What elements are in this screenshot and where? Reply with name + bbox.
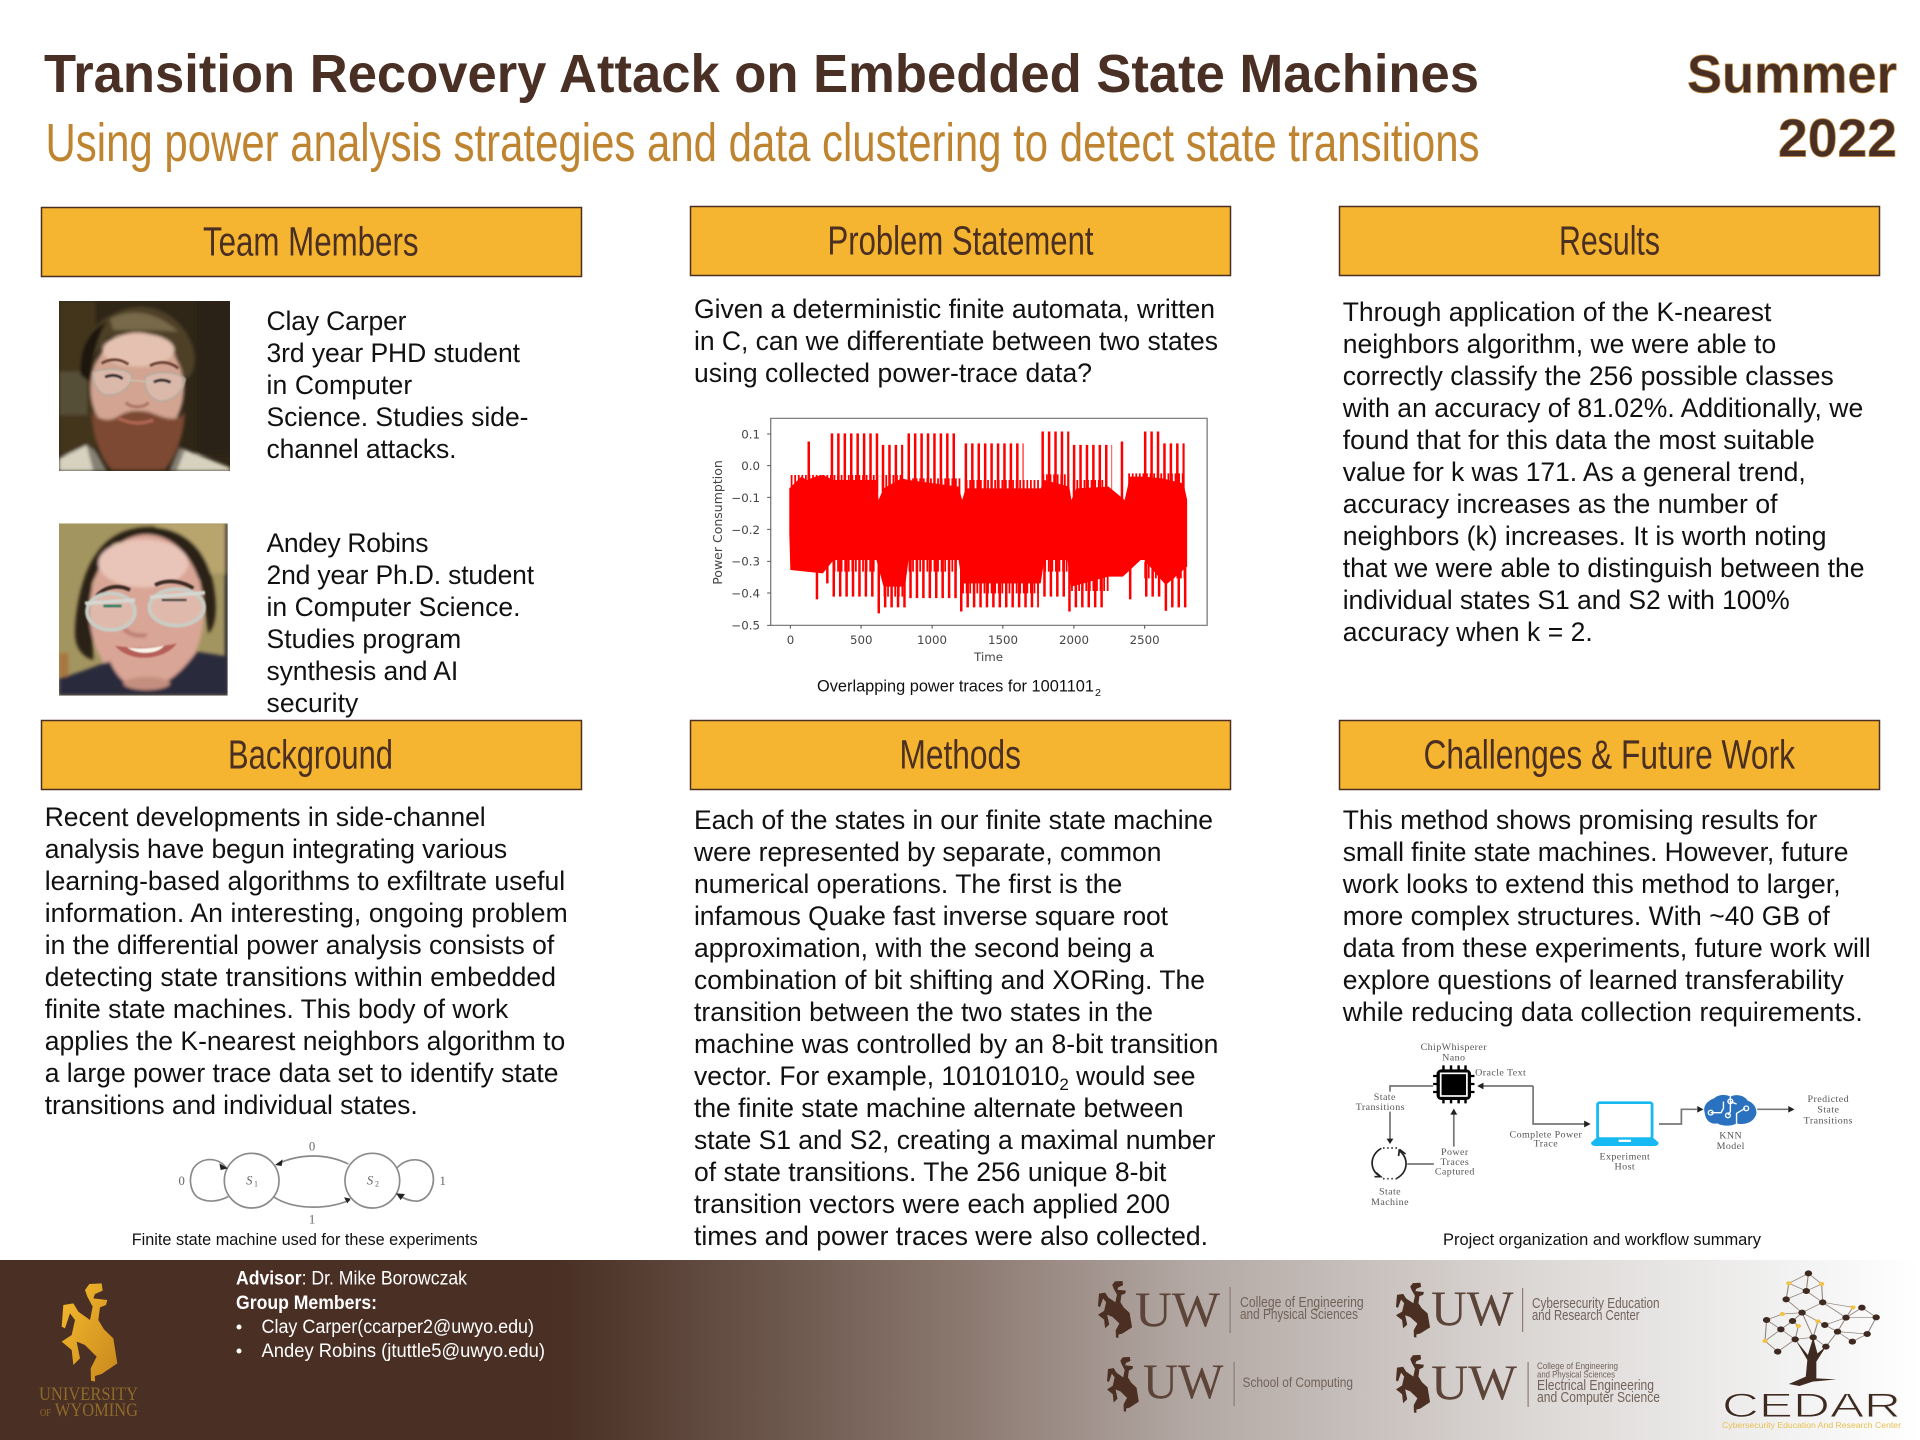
text: background: learning-based algorithms to exfiltrate useful (45, 866, 565, 896)
text: results: found that for this data the most suitable (1343, 425, 1815, 455)
text: problem statement: Given a deterministic finite automata, written (694, 294, 1215, 324)
diagram: finite state machine: 2 (375, 1180, 379, 1189)
text: methods: state S1 and S2, creating a maximal number (694, 1125, 1216, 1155)
text: challenges: explore questions of learned transferability (1343, 965, 1844, 995)
footer band (0, 1260, 1920, 1440)
logo: UW Cybersecurity Education and Research Center: UW (1431, 1280, 1514, 1336)
footer contact text: Andey Robins (jtuttle5@uwyo.edu) (262, 1341, 545, 1362)
logo: UW College of Engineering and Physical Sciences: and Physical Sciences (1240, 1307, 1358, 1323)
text: Andey Robins bio (266, 528, 535, 718)
workflow labels: Traces (1440, 1157, 1469, 1168)
logo wordmark (39, 1384, 138, 1421)
panel: methods (690, 720, 1230, 1251)
text: background: applies the K-nearest neighbors algorithm to (45, 1026, 565, 1056)
text: results: with an accuracy of 81.02%. Additionally, we (1342, 393, 1863, 423)
text: methods: machine was controlled by an 8-bit transition (694, 1029, 1218, 1059)
text: methods: 2 (1059, 1075, 1069, 1094)
workflow labels: Experiment (1599, 1151, 1650, 1162)
heading: methods: Methods (900, 732, 1021, 778)
diagram: finite state machine: 1 (254, 1180, 258, 1189)
heading: background: Background (228, 732, 393, 778)
y axis tick labels: −0.5 (731, 618, 760, 632)
footer contact text (236, 1268, 545, 1362)
text: challenges: This method shows promising results for (1343, 805, 1817, 835)
x axis tick labels: 500 (850, 633, 873, 647)
heading: team members (42, 208, 582, 276)
text: challenges: while reducing data collection requirements. (1342, 997, 1863, 1027)
workflow labels: Nano (1442, 1053, 1465, 1064)
icon: network tree (1762, 1270, 1880, 1386)
text: Clay Carper bio: channel attacks. (266, 434, 456, 464)
workflow labels: State (1379, 1186, 1401, 1197)
text: methods: were represented by separate, common (693, 837, 1162, 867)
text: results (1342, 297, 1864, 647)
text: results: correctly classify the 256 possible classes (1343, 361, 1834, 391)
text: Clay Carper bio: Science. Studies side- (266, 402, 528, 432)
diagram: finite state machine: 0 (309, 1140, 315, 1154)
icon: state machine cycle (1372, 1148, 1406, 1179)
text: results: accuracy when k = 2. (1343, 617, 1593, 647)
text: background: information. An interesting, ongoing problem (45, 898, 568, 928)
workflow labels: Trace (1534, 1139, 1558, 1150)
date: Summer 2022 (1687, 44, 1897, 168)
text: Andey Robins bio: synthesis and AI (266, 656, 458, 686)
workflow labels: Complete Power (1510, 1129, 1583, 1140)
workflow labels: Transitions (1804, 1116, 1853, 1127)
heading: challenges and future work (1340, 720, 1880, 790)
logo: UW Electrical Engineering and Computer Science (1396, 1354, 1660, 1413)
workflow labels: Oracle Text (1475, 1068, 1526, 1079)
icon: laptop (1591, 1103, 1659, 1146)
workflow labels: Transitions (1356, 1102, 1405, 1113)
icon: chip (1433, 1065, 1474, 1103)
text: challenges: data from these experiments, future work will (1343, 933, 1871, 963)
x axis tick labels (787, 633, 1160, 647)
text: background: in the differential power analysis consists of (45, 930, 555, 960)
text: results: Through application of the K-nearest (1343, 297, 1772, 327)
text: background (45, 802, 568, 1120)
logo: UW Electrical Engineering and Computer Science: College of Engineering (1537, 1361, 1618, 1372)
panel: background (42, 720, 582, 1249)
workflow labels: Host (1615, 1161, 1635, 1172)
text: methods: the finite state machine alternate between (694, 1093, 1184, 1123)
logo: UW College of Engineering and Physical Sciences: UW (1135, 1281, 1221, 1337)
icon: gold bucking horse (62, 1283, 117, 1382)
text: challenges (1342, 805, 1871, 1027)
caption: workflow: Project organization and workflow summary (1443, 1230, 1761, 1249)
text: Clay Carper bio: 3rd year PHD student (266, 338, 521, 368)
x axis tick labels: 2000 (1059, 633, 1089, 647)
heading: problem statement (690, 206, 1230, 276)
text: problem statement: in C, can we differentiate between two states (694, 326, 1218, 356)
subtitle: Using power analysis strategies and data clustering to detect state transitions (46, 113, 1480, 173)
heading: results: Results (1559, 218, 1660, 264)
logo: CEDAR (1722, 1270, 1901, 1430)
text: Andey Robins bio: 2nd year Ph.D. student (266, 560, 535, 590)
text: Clay Carper bio: in Computer (266, 370, 412, 400)
text: methods: Each of the states in our finite state machine (694, 805, 1213, 835)
text: challenges: more complex structures. With ~40 GB of (1343, 901, 1830, 931)
text: Andey Robins bio: in Computer Science. (266, 592, 520, 622)
diagram: finite state machine: S (246, 1174, 253, 1188)
text: results: neighbors (k) increases. It is worth noting (1343, 521, 1826, 551)
text: Andey Robins bio: Studies program (266, 624, 461, 654)
workflow labels: Model (1717, 1141, 1745, 1152)
text: challenges: work looks to extend this method to larger, (1342, 869, 1841, 899)
text: results: neighbors algorithm, we were able to (1343, 329, 1776, 359)
heading: challenges and future work: Challenges & Future Work (1424, 732, 1795, 778)
workflow labels: State (1374, 1092, 1396, 1103)
y axis tick labels: −0.2 (731, 523, 760, 537)
heading: methods (690, 720, 1230, 790)
logo wordmark: UNIVERSITY (39, 1384, 138, 1405)
x axis title: Time (973, 650, 1003, 664)
heading: background (42, 720, 582, 790)
plot area and red traces (767, 418, 1207, 629)
text: background: transitions and individual states. (45, 1090, 418, 1120)
connector lines and arrows (1387, 1083, 1794, 1164)
text: methods: transition between the two states in the (694, 997, 1153, 1027)
y axis tick labels: 0.0 (741, 459, 760, 473)
text: methods: vector. For example, 10101010 (694, 1061, 1059, 1091)
footer contact text: Clay Carper(ccarper2@uwyo.edu) (262, 1317, 534, 1338)
text: methods: infamous Quake fast inverse square root (694, 901, 1169, 931)
text: problem statement (694, 294, 1218, 388)
y axis tick labels: −0.4 (731, 586, 760, 600)
diagram: finite state machine: 1 (439, 1174, 446, 1188)
text: challenges: small finite state machines. However, future (1343, 837, 1848, 867)
logo: UW School of Computing: School of Computing (1242, 1375, 1353, 1390)
y axis tick labels: −0.1 (731, 491, 760, 505)
date: Summer 2022: Summer (1687, 44, 1897, 104)
text: methods: approximation, with the second being a (694, 933, 1154, 963)
logo: UW Electrical Engineering and Computer Science: and Physical Sciences (1537, 1370, 1615, 1380)
workflow labels: ChipWhisperer (1421, 1042, 1487, 1053)
x axis tick labels: 1500 (988, 633, 1018, 647)
logo: UW Electrical Engineering and Computer Science: UW (1431, 1354, 1518, 1410)
heading: results (1340, 206, 1880, 276)
logo: UW College of Engineering and Physical Sciences: College of Engineering (1240, 1295, 1364, 1311)
y axis title: Power Consumption (710, 460, 725, 585)
text: problem statement: using collected power-trace data? (694, 358, 1092, 388)
logo: UW Cybersecurity Education and Research Center: Cybersecurity Education (1532, 1296, 1660, 1312)
text: methods: would see (1069, 1061, 1196, 1091)
workflow labels: Captured (1435, 1166, 1475, 1177)
panel: team members (42, 208, 582, 718)
panel: challenges and future work (1340, 720, 1880, 1249)
photo: Clay Carper (59, 301, 230, 471)
diagram: finite state machine (179, 1140, 446, 1226)
logo: University of Wyoming (39, 1283, 138, 1421)
heading: problem statement: Problem Statement (828, 218, 1094, 264)
text: results: value for k was 171. As a general trend, (1343, 457, 1806, 487)
workflow labels (1356, 1042, 1853, 1208)
logo: UW College of Engineering and Physical Sciences (1098, 1281, 1364, 1338)
text: methods: numerical operations. The first is the (694, 869, 1122, 899)
diagram: finite state machine: 1 (309, 1212, 315, 1226)
diagram: project workflow (1356, 1042, 1853, 1208)
text: methods: combination of bit shifting and XORing. The (694, 965, 1205, 995)
workflow labels: KNN (1719, 1130, 1742, 1141)
text: results: accuracy increases as the number of (1343, 489, 1778, 519)
panel: results (1340, 206, 1880, 647)
text: Andey Robins bio: Andey Robins (266, 528, 428, 558)
footer contact text: Group Members: (236, 1293, 377, 1314)
text: Andey Robins bio: security (266, 688, 359, 718)
x axis tick labels: 1000 (917, 633, 947, 647)
photo: Andey Robins (59, 523, 228, 696)
caption: power traces: Overlapping power traces for 1001101 (817, 676, 1094, 696)
title: Transition Recovery Attack on Embedded State Machines (44, 44, 1479, 104)
text: background: Recent developments in side-channel (45, 802, 486, 832)
y axis tick labels: −0.3 (731, 554, 760, 568)
y axis tick labels: 0.1 (741, 428, 760, 442)
text: background: analysis have begun integrating various (45, 834, 507, 864)
x axis tick labels: 0 (787, 633, 794, 647)
logo: UW School of Computing: UW (1143, 1353, 1224, 1409)
workflow labels: Machine (1371, 1197, 1409, 1208)
y axis tick labels (731, 428, 760, 632)
caption: finite state machine: Finite state machine used for these experiments (132, 1230, 478, 1249)
CEDAR tagline: Cybersecurity Education And Research Center (1722, 1421, 1901, 1430)
text: methods (693, 805, 1218, 1251)
date: Summer 2022: 2022 (1778, 108, 1897, 168)
icon: KNN brain (1704, 1095, 1756, 1126)
workflow labels: Predicted (1808, 1094, 1849, 1105)
logo: UW Electrical Engineering and Computer Science: Electrical Engineering (1537, 1378, 1654, 1394)
text: methods: transition vectors were each applied 200 (694, 1189, 1170, 1219)
text: Clay Carper bio (266, 306, 528, 464)
caption subscript: 2 (1095, 688, 1101, 699)
diagram: finite state machine: 0 (179, 1174, 185, 1188)
diagram: finite state machine: S (367, 1174, 374, 1188)
text: results: that we were able to distinguish between the (1343, 553, 1864, 583)
heading: team members: Team Members (203, 218, 418, 264)
logo: UW Cybersecurity Education and Research Center: and Research Center (1532, 1308, 1640, 1324)
x axis tick labels: 2500 (1130, 633, 1160, 647)
logo wordmark: OF WYOMING (40, 1400, 138, 1421)
logo: UW Electrical Engineering and Computer Science: and Computer Science (1537, 1390, 1660, 1406)
text: methods: of state transitions. The 256 unique 8-bit (694, 1157, 1167, 1187)
chart: overlapping power traces (710, 418, 1207, 664)
text: Clay Carper bio: Clay Carper (266, 306, 407, 336)
text: background: detecting state transitions within embedded (45, 962, 556, 992)
CEDAR wordmark: CEDAR (1722, 1387, 1901, 1425)
text: background: a large power trace data set to identify state (45, 1058, 558, 1088)
text: background: finite state machines. This body of work (45, 994, 509, 1024)
text: methods: times and power traces were also collected. (694, 1221, 1208, 1251)
text: results: individual states S1 and S2 with 100% (1343, 585, 1790, 615)
panel: problem statement (690, 206, 1230, 696)
workflow labels: Power (1441, 1147, 1469, 1158)
workflow labels: State (1817, 1105, 1840, 1116)
footer contact text: Advisor: Dr. Mike Borowczak (236, 1268, 467, 1290)
logo: UW Cybersecurity Education and Research Center (1396, 1280, 1660, 1338)
logo: UW School of Computing (1107, 1353, 1353, 1412)
